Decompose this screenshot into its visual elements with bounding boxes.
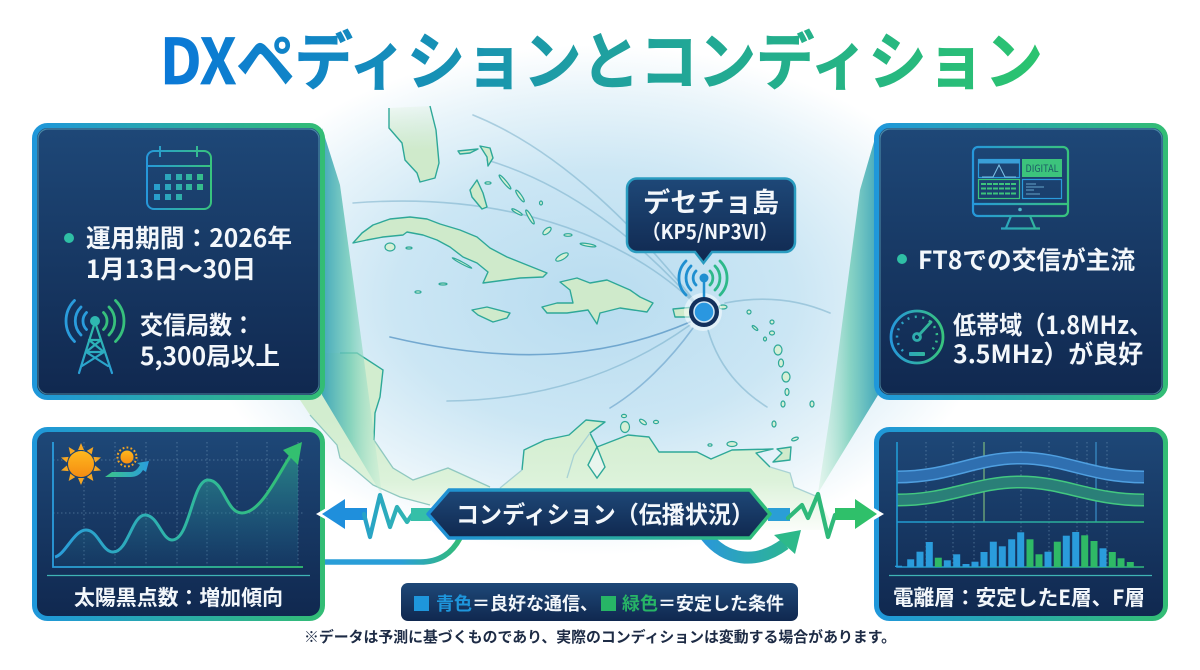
icon: antenna and location node bbox=[679, 261, 727, 331]
text: 5300 stations: 5,300局以上 bbox=[140, 337, 280, 373]
text: callsign: （KP5/NP3VI） bbox=[642, 216, 778, 245]
connector line left bbox=[325, 538, 460, 562]
bullet bbox=[897, 254, 907, 264]
land: central america fill bbox=[300, 353, 490, 525]
icon: small arrow bbox=[105, 461, 149, 477]
chart: ionosphere layers bbox=[895, 442, 1144, 567]
icon: radio tower bbox=[66, 300, 124, 373]
text: condition label: コンディション（伝播状況） bbox=[456, 495, 754, 530]
legend: blue label: 青色 bbox=[436, 590, 472, 616]
land: puerto rico bbox=[673, 307, 695, 317]
legend bbox=[401, 583, 798, 621]
icon: calendar bbox=[147, 146, 211, 209]
panel: digital mode bbox=[876, 126, 1166, 398]
land: central america outer coast bbox=[310, 415, 490, 505]
background sea glow bbox=[195, 45, 995, 555]
land: cuba bbox=[353, 217, 547, 283]
callout: DXpedition location bbox=[627, 178, 795, 263]
banner: condition bbox=[428, 490, 770, 538]
footnote: ※データは予測に基づくものであり、実際のコンディションは変動する場合があります。 bbox=[304, 626, 896, 647]
legend: green meaning: ＝安定した条件 bbox=[658, 590, 784, 616]
text: operation period: 運用期間：2026年 bbox=[86, 219, 292, 255]
text: low bands: 低帯域（1.8MHz、 bbox=[953, 306, 1152, 342]
legend: blue swatch bbox=[414, 596, 429, 611]
land: lake maracaibo bbox=[588, 447, 605, 478]
text: good condition: 3.5MHz）が良好 bbox=[953, 335, 1143, 371]
land: florida bbox=[389, 106, 439, 182]
icon: gauge bbox=[891, 311, 943, 363]
land: south america faded coast bbox=[500, 433, 818, 497]
land: central america caribbean coast bbox=[340, 353, 383, 440]
text: sunspot label: 太陽黒点数：増加傾向 bbox=[74, 582, 283, 612]
land: south america fill bbox=[470, 420, 835, 530]
land: abaco and grand bahama bbox=[458, 146, 493, 166]
icon: monitor bbox=[973, 147, 1068, 228]
title: DXペディションとコンディション bbox=[160, 12, 1043, 103]
panel: ionosphere bbox=[876, 430, 1166, 618]
icon: large sun bbox=[60, 443, 102, 485]
light beam right bbox=[818, 128, 878, 493]
text: dates: 1月13日～30日 bbox=[86, 250, 256, 286]
land: hispaniola bbox=[542, 278, 653, 324]
arrow left with wave bbox=[316, 495, 431, 537]
text: ionosphere label: 電離層：安定したE層、F層 bbox=[893, 582, 1145, 612]
small islands bbox=[385, 174, 814, 446]
panel: sunspot number bbox=[34, 430, 322, 618]
text: FT8: FT8での交信が主流 bbox=[918, 241, 1135, 277]
arrow right with wave bbox=[768, 494, 884, 537]
caribbean map bbox=[300, 106, 835, 530]
legend: blue meaning: ＝良好な通信、 bbox=[472, 590, 598, 616]
land: andros bbox=[470, 180, 487, 209]
chart: sunspot trend bbox=[53, 442, 303, 567]
propagation lines bbox=[353, 115, 830, 408]
bullet bbox=[64, 233, 74, 243]
text: station count: 交信局数： bbox=[140, 306, 255, 342]
text: island name: デセチョ島 bbox=[643, 181, 779, 220]
light beam left bbox=[322, 128, 382, 495]
curved arrow right bbox=[706, 530, 801, 558]
legend: green label: 緑色 bbox=[622, 590, 658, 616]
legend: green swatch bbox=[601, 596, 616, 611]
icon: monitor: DIGITAL bbox=[1026, 160, 1059, 175]
land: south america coast bbox=[522, 420, 773, 470]
icon: small sun bbox=[118, 448, 136, 466]
land: jamaica bbox=[472, 307, 510, 322]
land: trinidad bbox=[773, 447, 791, 462]
panel: operation summary bbox=[34, 126, 322, 398]
